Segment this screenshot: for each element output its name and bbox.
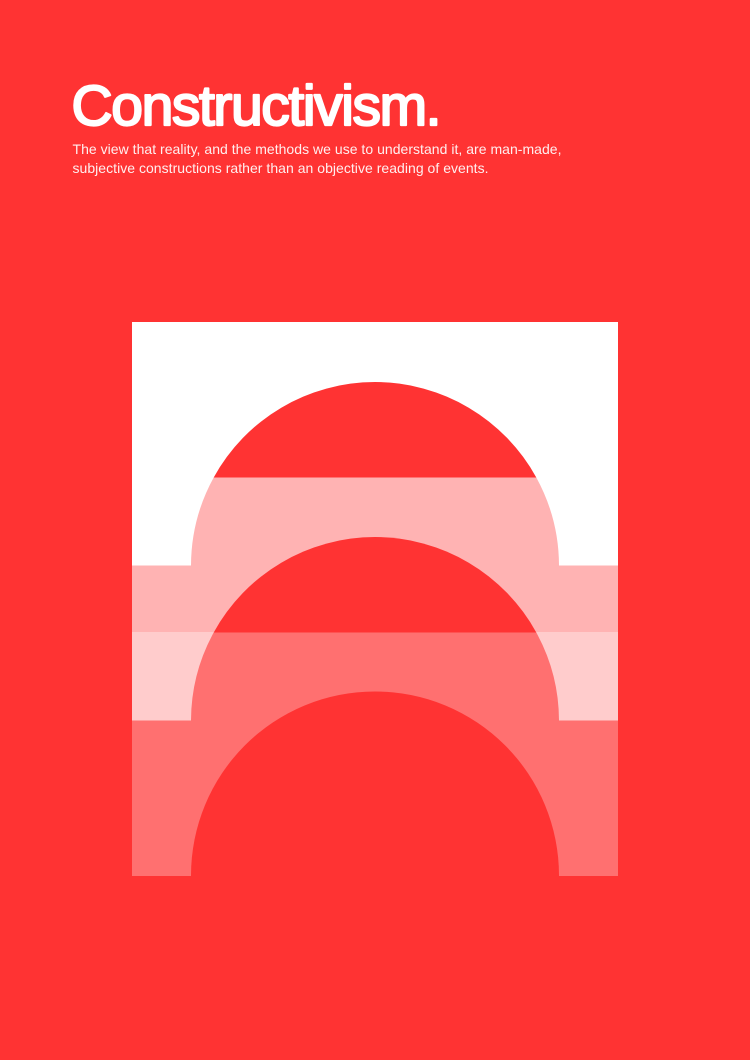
white top panel: [132, 322, 618, 566]
title: Constructivism.: [72, 74, 442, 138]
description text: The view that reality, and the methods we use to understand it, are man-made,: [72, 141, 562, 157]
light overlap band: [132, 632, 618, 721]
top arch: pink lower section and band: [132, 478, 618, 632]
description text: subjective constructions rather than an objective reading of events.: [72, 160, 488, 176]
bottom arch: red: [191, 692, 559, 876]
middle arch: mid-tone lower section and band: [132, 632, 618, 876]
top arch: red cap: [214, 382, 536, 478]
description text: [72, 141, 562, 176]
middle arch: red cap: [214, 537, 536, 632]
geometric arch diagram: [132, 322, 618, 876]
